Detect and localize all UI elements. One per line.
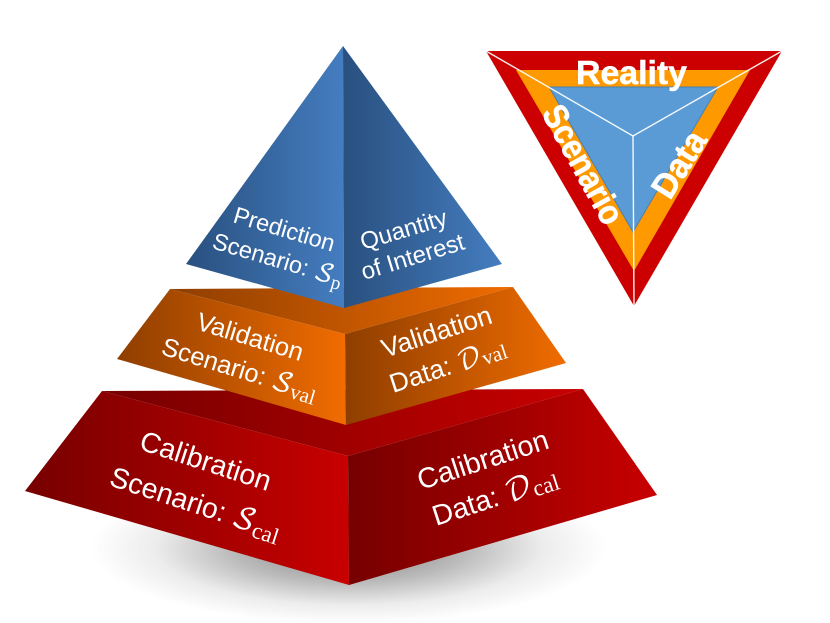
floor shadow — [91, 472, 607, 623]
calibration data label — [413, 424, 563, 534]
tier: validation — [117, 287, 566, 425]
validation top face — [170, 287, 513, 334]
validation data face — [345, 287, 566, 425]
calibration scenario label: cal — [249, 518, 282, 550]
calibration data label: cal — [529, 469, 563, 502]
calibration scenario label: Calibration — [136, 425, 275, 498]
triangle diagram — [486, 51, 782, 306]
validation data label — [378, 300, 511, 400]
prediction scenario face — [186, 46, 344, 308]
validation scenario label: Validation — [193, 308, 307, 367]
pyramid — [25, 46, 657, 585]
validation data label: Validation — [378, 300, 496, 364]
tier: prediction — [186, 46, 502, 308]
prediction scenario label — [208, 202, 346, 295]
calibration scenario face — [25, 391, 349, 585]
validation scenario label — [157, 308, 321, 410]
label: scenario: Scenario — [534, 98, 632, 231]
validation scenario label: Scenario: 𝒮 — [158, 333, 296, 399]
validation scenario face — [117, 289, 346, 425]
label: data: Data — [644, 123, 715, 205]
validation data label: Data: 𝒟 — [386, 343, 486, 399]
calibration data label: Data: 𝒟 — [428, 472, 537, 533]
tier: calibration — [25, 389, 657, 585]
quantity of interest label: Quantity — [357, 204, 450, 256]
validation data label: val — [479, 339, 511, 370]
calibration data label: Calibration — [413, 424, 553, 497]
prediction scenario label: Prediction — [231, 202, 338, 256]
validation scenario label: val — [287, 379, 319, 410]
white spokes — [486, 51, 782, 306]
label: reality: Reality — [576, 54, 688, 91]
prediction scenario label: Scenario: 𝒮 — [210, 228, 336, 289]
calibration scenario label — [105, 425, 285, 550]
calibration scenario label: Scenario: 𝒮 — [106, 461, 259, 538]
quantity of interest label — [357, 204, 468, 286]
quantity of interest label: of Interest — [358, 229, 468, 286]
calibration top face — [102, 389, 583, 456]
core: blue — [549, 87, 718, 232]
quantity of interest face — [343, 46, 502, 308]
band: orange — [516, 70, 750, 271]
reality band — [486, 51, 782, 306]
calibration data face — [348, 389, 657, 585]
prediction scenario label: p — [328, 272, 343, 295]
